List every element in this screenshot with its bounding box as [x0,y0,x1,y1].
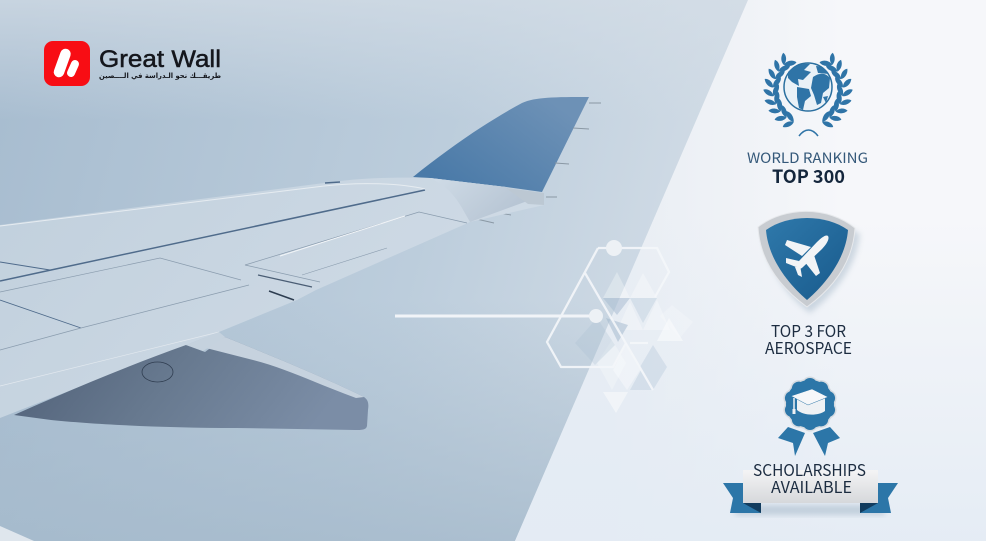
wing lower highlight [186,332,225,351]
right panel [515,0,986,541]
airplane wing photo [0,97,601,430]
fairing access panel [142,362,173,382]
label: top 3 for: TOP 3 FOR [771,318,846,342]
badge: scholarships available [723,376,898,515]
label: scholarships: SCHOLARSHIPS [753,457,866,481]
logo wordmark: Great Wall [99,46,221,73]
translucent triangles [597,272,693,413]
label: available: AVAILABLE [771,474,852,498]
wing tip blend [430,178,530,222]
darker diamonds [575,298,667,390]
banner left tail [723,483,761,513]
wing surface [0,178,544,418]
icon: rosette ribbons [778,427,805,456]
fairing highlight [206,337,364,398]
banner [743,470,878,503]
label: world ranking: WORLD RANKING [747,147,868,168]
node circles [606,240,622,256]
icon: shield [758,211,860,313]
banner shadow [735,505,885,515]
icon: graduation cap [791,389,828,415]
badge: top 3 for aerospace [758,211,860,359]
winglet [413,97,589,192]
logo Arabic tagline: طريقـــك نحو الـدراسة في الــــصين [99,72,221,80]
logo icon [44,41,90,86]
connector line [395,314,596,318]
winglet root fitting [506,188,544,205]
icon: airplane [785,235,829,277]
bottom-left corner wedge [0,526,34,541]
icon: laurel wreath [763,51,853,136]
hexagon outlines [547,248,669,390]
banner right tail [860,483,898,513]
label: top 300: TOP 300 [772,163,845,189]
label: aerospace: AEROSPACE [765,335,852,359]
banner fold shadows [743,503,878,513]
icon: rosette [781,376,839,432]
winglet static wicks [472,103,601,223]
logo [44,41,221,86]
badge: world ranking [747,51,868,189]
hexagon network graphic [395,240,693,413]
engine fairing [14,337,368,430]
icon: globe [784,63,832,111]
wing panel lines [0,182,467,386]
